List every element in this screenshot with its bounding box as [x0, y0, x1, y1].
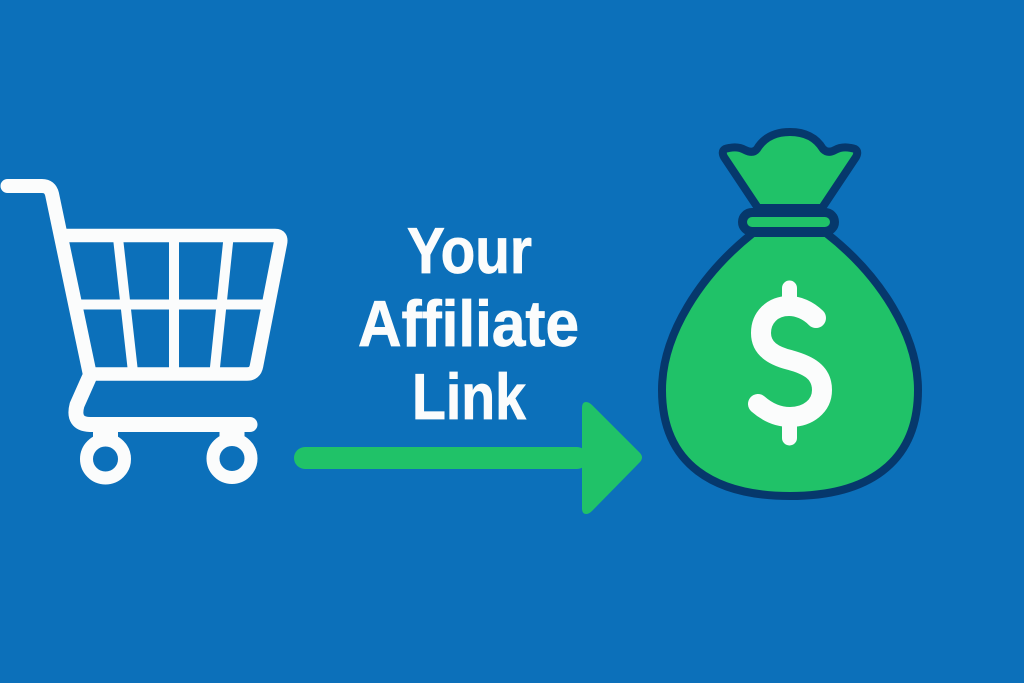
- right wheel: [213, 440, 251, 478]
- word: Affiliate: Affiliate: [358, 287, 579, 360]
- arrow shaft: [294, 447, 588, 469]
- basket outline: [61, 236, 281, 374]
- word: Your: Your: [407, 214, 532, 287]
- dollar vertical bar: [782, 288, 797, 438]
- cart handle and left rail: [8, 186, 90, 375]
- bag body: [662, 233, 918, 496]
- dollar S curve: [758, 306, 822, 417]
- dollar sign: [758, 288, 822, 438]
- bag neck: [723, 132, 857, 208]
- icon: money bag: [662, 132, 918, 496]
- basket grid: [70, 238, 268, 372]
- bag tie band: [742, 212, 834, 232]
- arrow head: [582, 402, 642, 514]
- cart chassis: [76, 378, 250, 424]
- left wheel: [86, 440, 124, 478]
- arrow: cart to money bag: [294, 402, 642, 514]
- word: Link: Link: [412, 360, 527, 433]
- heading: Your Affiliate Link: [358, 214, 579, 433]
- icon: shopping cart: [8, 186, 281, 478]
- wheel connectors: [106, 428, 232, 438]
